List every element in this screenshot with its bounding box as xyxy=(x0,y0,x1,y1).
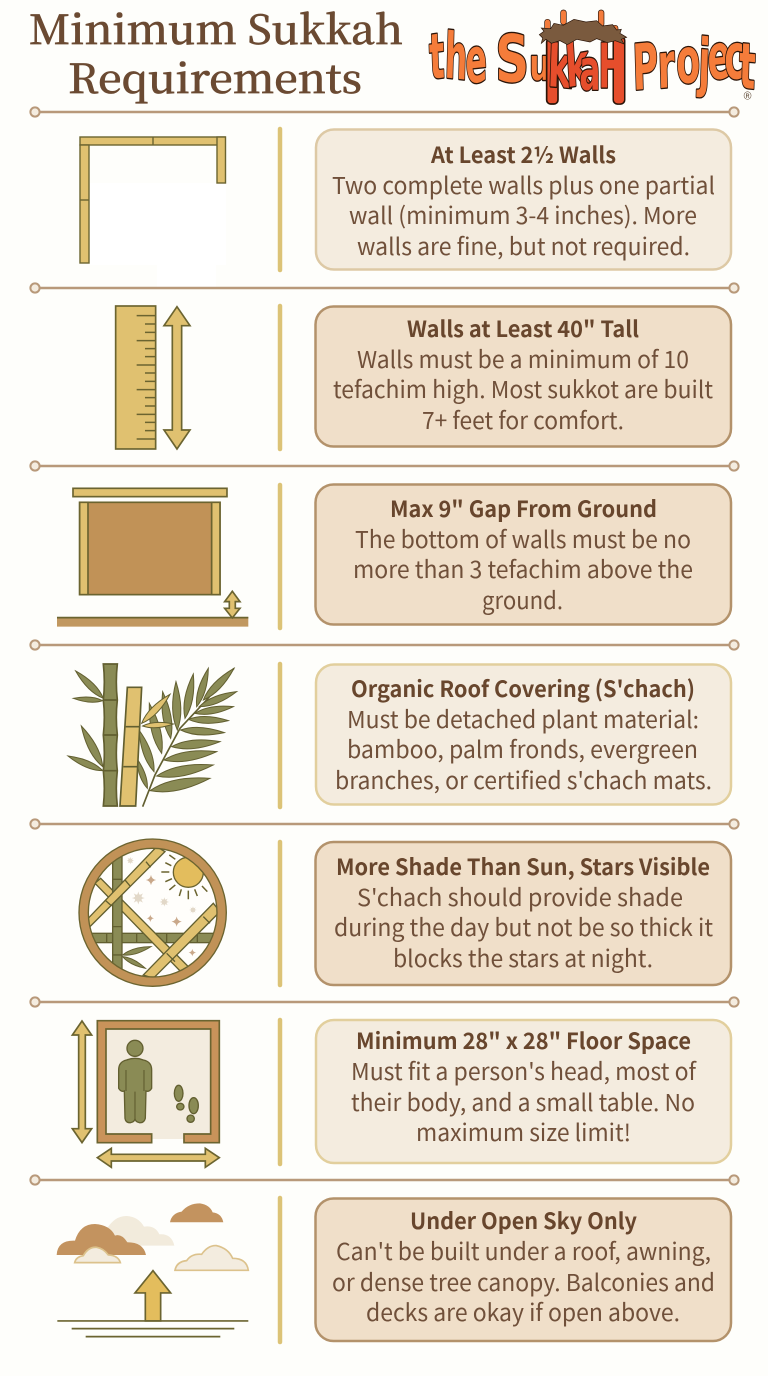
row 4: s'chach xyxy=(67,664,731,807)
separator xyxy=(278,129,282,270)
icon: bamboo and palm frond xyxy=(67,664,238,807)
card: floor space: Must fit a person's head, most of xyxy=(351,1053,697,1087)
card: more shade than sun: S'chach should provide shade xyxy=(357,879,683,913)
card: organic roof covering xyxy=(316,664,731,804)
card: under open sky xyxy=(316,1198,731,1341)
card: organic roof covering: bamboo, palm fronds, evergreen xyxy=(347,731,698,765)
card: max gap: ground. xyxy=(482,582,563,616)
logo: The Sukkah Project: the xyxy=(428,19,488,98)
logo roof xyxy=(539,19,627,45)
row 7: open sky xyxy=(57,1198,731,1342)
card: more shade than sun: blocks the stars at night. xyxy=(393,940,653,974)
icon: clouds and upward arrow xyxy=(57,1203,248,1337)
divider 4 xyxy=(30,640,739,650)
row 1: walls xyxy=(80,129,731,287)
card: organic roof covering: Must be detached plant material: xyxy=(347,701,699,735)
title: Requirements xyxy=(68,48,362,105)
card: floor space: maximum size limit! xyxy=(416,1114,631,1148)
card: under open sky: or dense tree canopy. Balconies and xyxy=(332,1264,715,1298)
row 5: shade xyxy=(79,839,731,986)
card: walls 40 inches xyxy=(316,306,731,446)
icon: floor plan with person and footprints xyxy=(72,1021,219,1167)
card: under open sky: decks are okay if open above. xyxy=(366,1294,680,1328)
logo: The Sukkah Project: H xyxy=(598,30,625,102)
logo: The Sukkah Project: u xyxy=(529,40,550,91)
icon: wall above ground with gap xyxy=(57,488,248,627)
white patch behind walls xyxy=(90,183,226,287)
card: at least 2.5 walls: walls are fine, but not required. xyxy=(357,228,690,262)
card: organic roof covering: branches, or certified s'chach mats. xyxy=(335,762,712,796)
title xyxy=(29,0,403,105)
card: floor space xyxy=(316,1020,731,1163)
logo: The Sukkah Project: Project xyxy=(632,20,757,106)
divider 6 xyxy=(30,997,739,1007)
card: more shade than sun: More Shade Than Sun, Stars Visible xyxy=(336,850,710,882)
title: Minimum Sukkah xyxy=(29,0,403,56)
separator xyxy=(278,306,282,449)
divider 2 xyxy=(30,283,739,293)
separator xyxy=(278,1020,282,1164)
row 3: gap xyxy=(57,484,731,628)
card: walls 40 inches: Walls at Least 40" Tall xyxy=(407,312,639,344)
icon: 2.5 walls xyxy=(80,137,226,263)
card: under open sky: Under Open Sky Only xyxy=(410,1204,637,1236)
card: at least 2.5 walls: wall (minimum 3-4 inches). More xyxy=(349,197,697,231)
card: more shade than sun: during the day but not be so thick it xyxy=(334,909,713,943)
separator xyxy=(278,485,282,628)
icon: ruler and height arrow xyxy=(116,306,190,449)
logo: The Sukkah Project: S xyxy=(495,22,529,97)
card: max gap: The bottom of walls must be no xyxy=(355,521,691,555)
card: at least 2.5 walls: At Least 2½ Walls xyxy=(430,138,616,170)
card: more shade than sun xyxy=(316,842,731,985)
registered mark: ® xyxy=(744,91,752,103)
logo roof pegs xyxy=(545,10,618,35)
card: walls 40 inches: 7+ feet for comfort. xyxy=(422,402,624,436)
card: max gap xyxy=(316,484,731,624)
divider 3 xyxy=(30,461,739,471)
card: walls 40 inches: tefachim high. Most sukkot are built xyxy=(333,371,713,405)
card: organic roof covering: Organic Roof Covering (S'chach) xyxy=(351,672,695,704)
card: at least 2.5 walls: Two complete walls plus one partial xyxy=(332,167,715,201)
row 2: height xyxy=(116,306,731,449)
divider 7 xyxy=(30,1175,739,1185)
divider 1 xyxy=(30,107,739,117)
separator xyxy=(278,842,282,985)
card: max gap: Max 9" Gap From Ground xyxy=(390,492,657,524)
logo: The Sukkah Project: a xyxy=(579,37,600,103)
card: max gap: more than 3 tefachim above the xyxy=(353,551,693,585)
icon: round window with bamboo, sun and stars xyxy=(79,839,226,986)
divider 5 xyxy=(30,819,739,829)
row 6: floor space xyxy=(72,1020,731,1167)
separator xyxy=(278,664,282,807)
card: under open sky: Can't be built under a roof, awning, xyxy=(336,1233,711,1267)
logo: sukkah posts xyxy=(547,37,625,104)
card: at least 2.5 walls xyxy=(316,130,731,270)
logo: The Sukkah Project: kk xyxy=(547,30,592,103)
card: floor space: Minimum 28" x 28" Floor Space xyxy=(356,1024,691,1056)
card: floor space: their body, and a small table. No xyxy=(351,1084,695,1118)
card: walls 40 inches: Walls must be a minimum of 10 xyxy=(357,341,689,375)
logo: The Sukkah Project xyxy=(428,10,757,106)
separator xyxy=(278,1198,282,1342)
